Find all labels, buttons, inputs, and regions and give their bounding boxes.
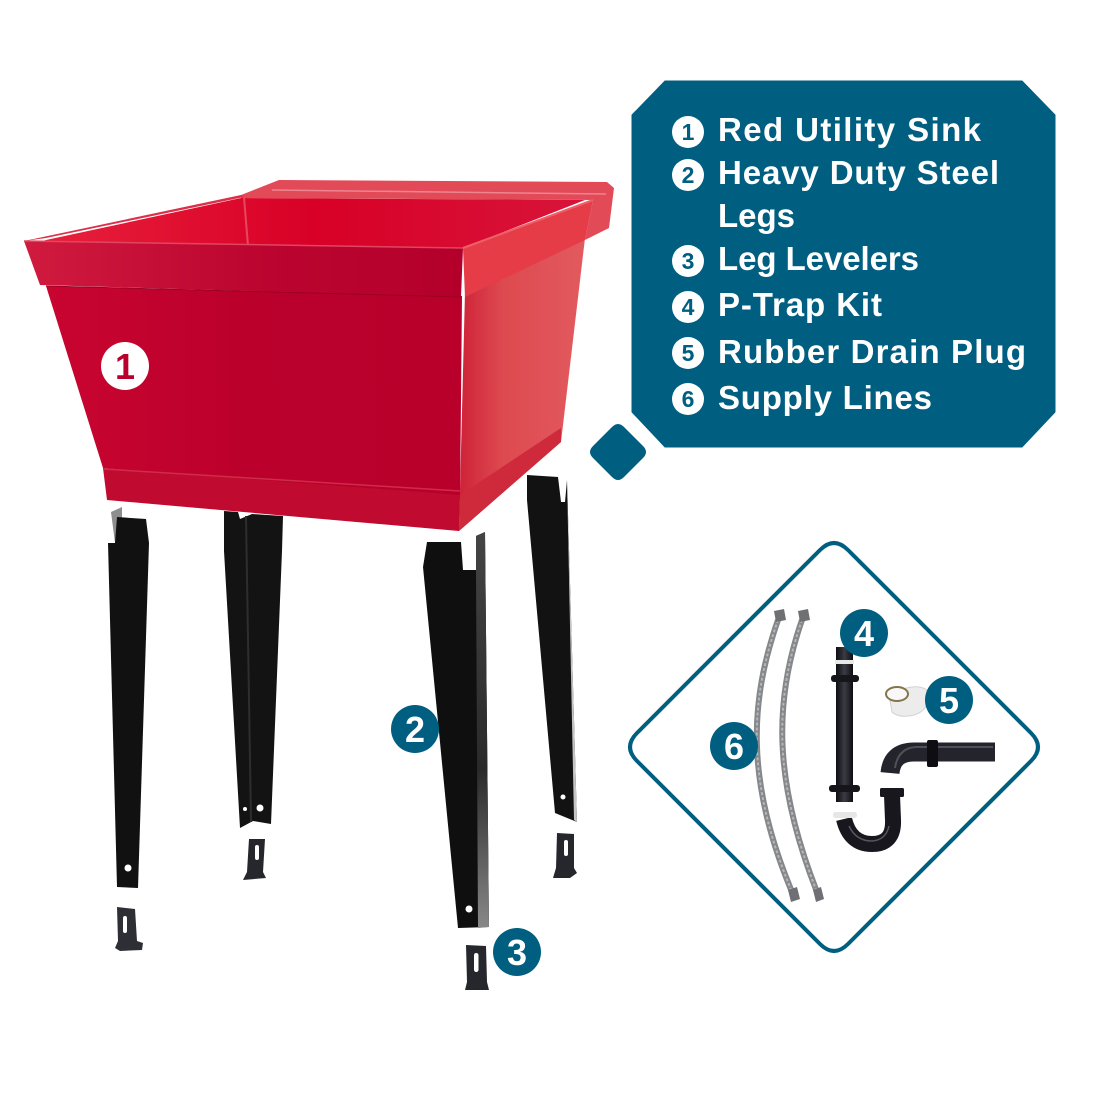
item 2 label: Legs [718, 197, 795, 234]
callout 5: 5 [939, 680, 959, 721]
sink tub [24, 180, 614, 531]
item 3 label: Leg Levelers [718, 240, 919, 277]
sink interior [40, 198, 585, 248]
item 4 badge [672, 291, 704, 323]
item 3 badge: 3 [682, 248, 694, 274]
item 1 badge [672, 116, 704, 148]
item 6 badge [672, 383, 704, 415]
leg leveler: back left [243, 839, 266, 880]
accessories diamond frame [630, 543, 1038, 951]
item 2 label: Heavy Duty Steel [718, 154, 999, 191]
item 6 label: Supply Lines [718, 379, 932, 416]
callout 1 on sink [101, 342, 149, 390]
supply line hoses [757, 609, 824, 902]
item 1 label: Red Utility Sink [718, 111, 982, 148]
steel leg: front left [108, 507, 149, 888]
sink right rim [463, 200, 593, 297]
callout 6: 6 [724, 726, 744, 767]
steel leg: back left [224, 511, 283, 828]
leg leveler: front right [465, 945, 489, 990]
P-trap elbow [890, 740, 995, 773]
callout 5 [925, 676, 973, 724]
steel leg: front right [423, 532, 489, 928]
P-trap U bend [833, 788, 904, 844]
sink front rim [24, 241, 463, 297]
sink back rim [241, 180, 614, 240]
item 3 badge [672, 245, 704, 277]
rubber drain plug [886, 687, 927, 716]
item 6 badge: 6 [682, 386, 694, 412]
leg leveler: back right [553, 833, 577, 878]
item 5 label: Rubber Drain Plug [718, 333, 1026, 370]
P-trap tailpiece pipe [829, 647, 860, 802]
parts list panel [632, 81, 1055, 447]
item 2 badge: 2 [682, 162, 694, 188]
small diamond pointer [590, 424, 646, 480]
callout 6 [710, 722, 758, 770]
leg leveler: front left [115, 907, 143, 951]
sink front wall [46, 286, 462, 500]
item 4 badge: 4 [682, 294, 695, 320]
item 4 label: P-Trap Kit [718, 286, 882, 323]
item 1 badge: 1 [682, 119, 695, 145]
callout 2 on leg: 2 [405, 709, 425, 750]
callout 2 on leg [391, 705, 439, 753]
steel leg: back right [527, 475, 577, 822]
callout 3 on leveler [493, 928, 541, 976]
sink right wall [459, 238, 585, 531]
item 2 badge [672, 159, 704, 191]
callout 4 [840, 609, 888, 657]
callout 4: 4 [854, 613, 874, 654]
callout 3 on leveler: 3 [507, 932, 527, 973]
item 5 badge: 5 [682, 340, 695, 366]
item 5 badge [672, 337, 704, 369]
sink bottom band [103, 468, 460, 531]
item 2 label [718, 154, 999, 234]
callout 1 on sink: 1 [115, 346, 135, 387]
